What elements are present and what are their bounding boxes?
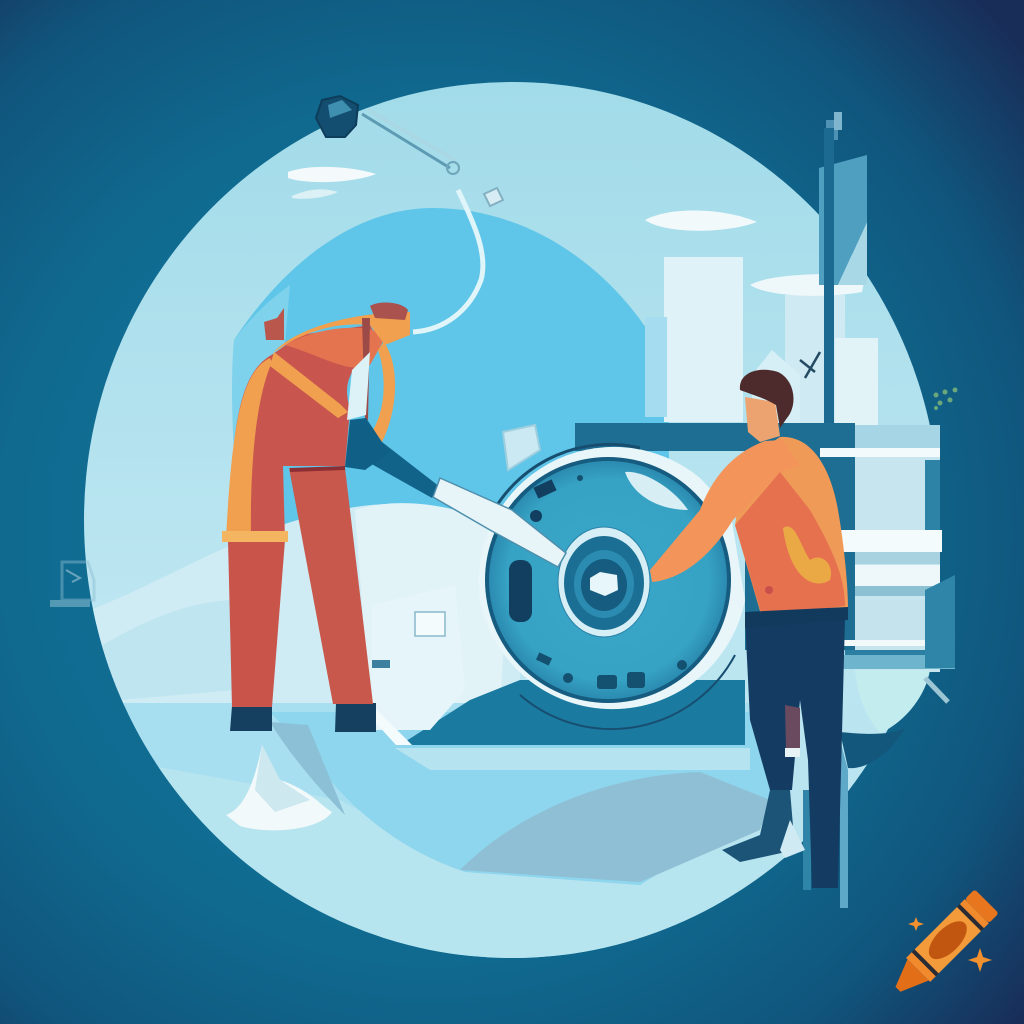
- legs: [745, 618, 845, 888]
- small machine left: [372, 585, 465, 745]
- head: [370, 303, 408, 320]
- confetti dots: [934, 388, 958, 410]
- torso: [228, 325, 380, 540]
- torso: [735, 437, 848, 618]
- water splash: [226, 745, 332, 830]
- wrench: [368, 442, 566, 567]
- hair: [740, 370, 793, 428]
- left faint badge: [50, 562, 94, 607]
- leg strips: [840, 740, 848, 908]
- tower pole: [819, 112, 867, 424]
- near floor: [158, 767, 722, 958]
- floor: [123, 703, 750, 810]
- scene circle: [84, 82, 940, 960]
- boot: [722, 790, 795, 862]
- large wheel: [479, 425, 745, 729]
- ceiling lamp and hose: [316, 96, 503, 332]
- blue floor: [270, 712, 775, 885]
- pale hills: [85, 504, 520, 720]
- glove: [345, 418, 390, 470]
- floor shadow wave: [460, 772, 770, 882]
- bird mark: [800, 352, 820, 378]
- city buildings: [645, 257, 878, 426]
- highlight: [625, 472, 688, 510]
- yellow patch: [783, 526, 831, 583]
- boots: [230, 706, 272, 731]
- bolts: [509, 560, 532, 622]
- machine cabinet right: [575, 423, 955, 768]
- belt line: [290, 466, 345, 472]
- belt: [745, 607, 848, 628]
- trousers: [228, 540, 285, 707]
- crayon logo: [886, 889, 999, 1002]
- right worker: [650, 370, 848, 908]
- orange stripes: [226, 358, 272, 538]
- clouds: [288, 167, 865, 296]
- blue hill: [234, 208, 669, 524]
- arm: [362, 318, 370, 420]
- arm: [650, 440, 800, 582]
- left worker: [222, 303, 410, 732]
- sparkles: [908, 917, 992, 972]
- dial: [558, 527, 650, 637]
- neck and face: [745, 397, 780, 442]
- machine base: [395, 680, 750, 770]
